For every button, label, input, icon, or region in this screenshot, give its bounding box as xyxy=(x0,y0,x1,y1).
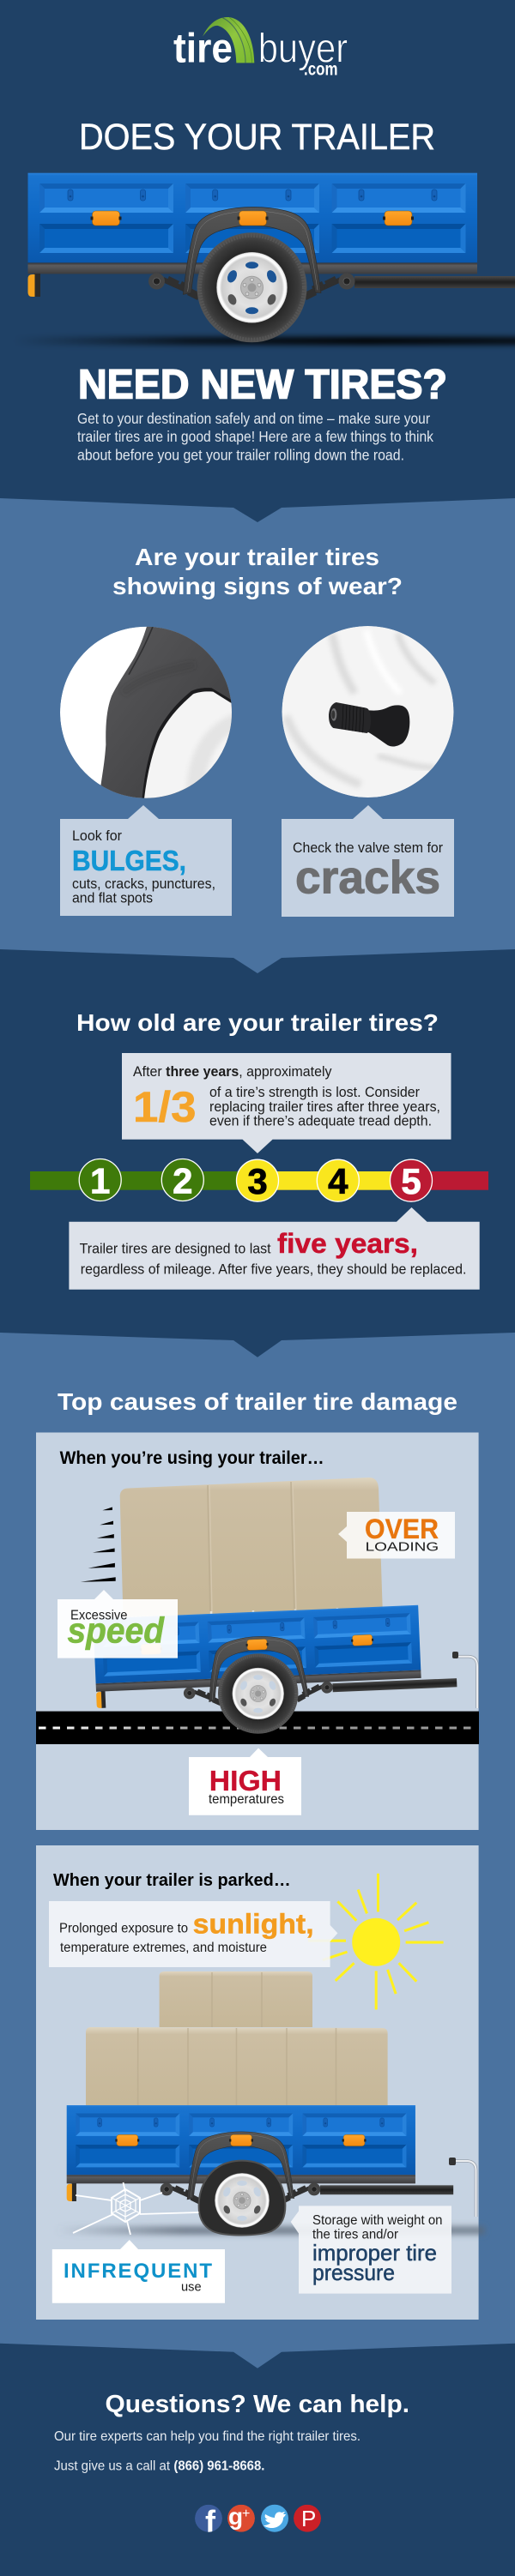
heading: signs of wear xyxy=(112,544,403,599)
callout: look for bulges xyxy=(60,805,232,916)
heading: signs of wear: Are your trailer tires xyxy=(135,544,379,570)
icon: google plus: g xyxy=(228,2503,243,2530)
heading: signs of wear: showing signs of wear? xyxy=(112,573,403,599)
heading: does your trailer: DOES YOUR TRAILER xyxy=(79,117,435,158)
callout: improper tire pressure: Storage with weight on xyxy=(312,2213,443,2228)
heading: top causes: Top causes of trailer tire damage xyxy=(58,1388,457,1415)
logo: tirebuyer.com xyxy=(173,17,348,79)
subheading: parked: When your trailer is parked… xyxy=(53,1871,291,1890)
callout: improper tire pressure xyxy=(291,2206,451,2294)
subheading: using: When you’re using your trailer… xyxy=(60,1448,324,1468)
panel: top causes section xyxy=(0,1333,515,2368)
callout: infrequent use: use xyxy=(181,2279,202,2295)
callout: after three years: even if there’s adequate tread depth. xyxy=(209,1113,432,1129)
callout: sunlight: sunlight, xyxy=(193,1908,314,1939)
contact text xyxy=(54,2429,360,2474)
icon: pinterest xyxy=(294,2505,321,2532)
panel: signs of wear section xyxy=(0,498,515,973)
callout: high temperatures xyxy=(189,1748,301,1815)
callout: look for bulges: Look for xyxy=(72,828,122,844)
contact text: Our tire experts can help you find the right trailer tires. xyxy=(54,2429,360,2444)
callout: check valve stem for cracks xyxy=(282,805,454,917)
callout: infrequent use xyxy=(52,2240,225,2303)
callout: high temperatures: temperatures xyxy=(209,1792,284,1807)
icon: google plus xyxy=(227,2503,255,2532)
callout: improper tire pressure: improper tire xyxy=(312,2240,437,2266)
intro paragraph: about before you get your trailer rolling down the road. xyxy=(77,447,404,464)
callout: excessive speed xyxy=(58,1590,178,1658)
callout: sunlight xyxy=(49,1901,337,1967)
icon: spider web xyxy=(73,2182,199,2235)
callout: sunlight: Prolonged exposure to xyxy=(59,1922,188,1936)
ground shadow under hero trailer xyxy=(13,337,515,345)
callout: sunlight: temperature extremes, and moisture xyxy=(60,1941,267,1955)
callout: check valve stem for cracks: cracks xyxy=(295,852,440,904)
callout: after three years: replacing trailer tires after three years, xyxy=(209,1098,440,1115)
callout: overloading xyxy=(338,1512,455,1559)
timeline: tire age years 1 to 5: 1 xyxy=(90,1161,110,1201)
logo: tirebuyer.com: buyer xyxy=(258,26,348,71)
icon: pinterest: P xyxy=(301,2506,316,2531)
photo: tire bulge xyxy=(60,624,234,804)
overloaded tarp cargo xyxy=(120,1478,383,1618)
panel: when using your trailer xyxy=(36,1432,479,1830)
stacked tarp cargo xyxy=(86,1971,388,2108)
heading: need new tires: NEED NEW TIRES? xyxy=(78,363,447,408)
callout: look for bulges: and flat spots xyxy=(72,891,153,906)
ground shadow xyxy=(56,2226,485,2235)
callout: after three years: of a tire’s strength is lost. Consider xyxy=(209,1084,420,1100)
logo: tirebuyer.com: tire xyxy=(173,26,233,71)
callout: after three years: After three years, approximately xyxy=(133,1063,332,1080)
callout: excessive speed: Excessive xyxy=(70,1609,127,1623)
panel: when parked xyxy=(36,1845,485,2320)
intro paragraph: trailer tires are in good shape! Here are a few things to think xyxy=(77,428,433,445)
icon: twitter xyxy=(261,2505,288,2532)
illustration: blue hero trailer xyxy=(27,173,515,342)
timeline: tire age years 1 to 5: 4 xyxy=(328,1161,348,1201)
intro paragraph: Get to your destination safely and on time – make sure your xyxy=(77,410,430,427)
heading: questions: Questions? We can help. xyxy=(105,2391,409,2418)
icon: facebook: f xyxy=(205,2504,216,2539)
tilted blue trailer xyxy=(93,1604,477,1734)
timeline: tire age years 1 to 5: 3 xyxy=(247,1161,268,1201)
callout: five years xyxy=(69,1207,480,1290)
icon: sun xyxy=(308,1874,444,2010)
road with dashed line xyxy=(36,1712,479,1744)
callout: after three years xyxy=(122,1053,451,1153)
callout: five years: Trailer tires are designed to last xyxy=(80,1241,271,1257)
icon: facebook xyxy=(195,2504,222,2532)
callout: high temperatures: HIGH xyxy=(209,1765,282,1797)
timeline: tire age years 1 to 5: 2 xyxy=(173,1161,192,1201)
timeline: tire age years 1 to 5 xyxy=(30,1159,488,1201)
blue parked trailer with flat tire xyxy=(67,2105,476,2235)
intro paragraph xyxy=(77,410,433,464)
contact text: (866) 961-8668. xyxy=(173,2459,264,2474)
callout: overloading: LOADING xyxy=(366,1541,439,1555)
callout: check valve stem for cracks: Check the valve stem for xyxy=(293,840,443,856)
callout: look for bulges: cuts, cracks, punctures, xyxy=(72,876,215,892)
callout: five years: five years, xyxy=(277,1228,418,1259)
icon: google plus: + xyxy=(242,2507,250,2521)
contact text: Just give us a call at xyxy=(54,2459,171,2474)
callout: excessive speed: speed xyxy=(67,1610,165,1651)
heading: how old: How old are your trailer tires? xyxy=(76,1009,439,1036)
callout: overloading: OVER xyxy=(365,1514,439,1544)
callout: look for bulges: BULGES, xyxy=(72,845,186,876)
callout: five years: regardless of mileage. After five years, they should be replaced. xyxy=(81,1261,466,1278)
speed lines xyxy=(81,1508,116,1582)
photo: valve stem xyxy=(282,626,453,797)
callout: after three years: 1/3 xyxy=(133,1083,196,1131)
callout: infrequent use: INFREQUENT xyxy=(64,2260,212,2283)
timeline: tire age years 1 to 5: 5 xyxy=(401,1161,421,1201)
callout: improper tire pressure: pressure xyxy=(312,2260,395,2285)
callout: improper tire pressure: the tires and/or xyxy=(312,2228,398,2242)
logo: tirebuyer.com: .com xyxy=(304,59,338,79)
